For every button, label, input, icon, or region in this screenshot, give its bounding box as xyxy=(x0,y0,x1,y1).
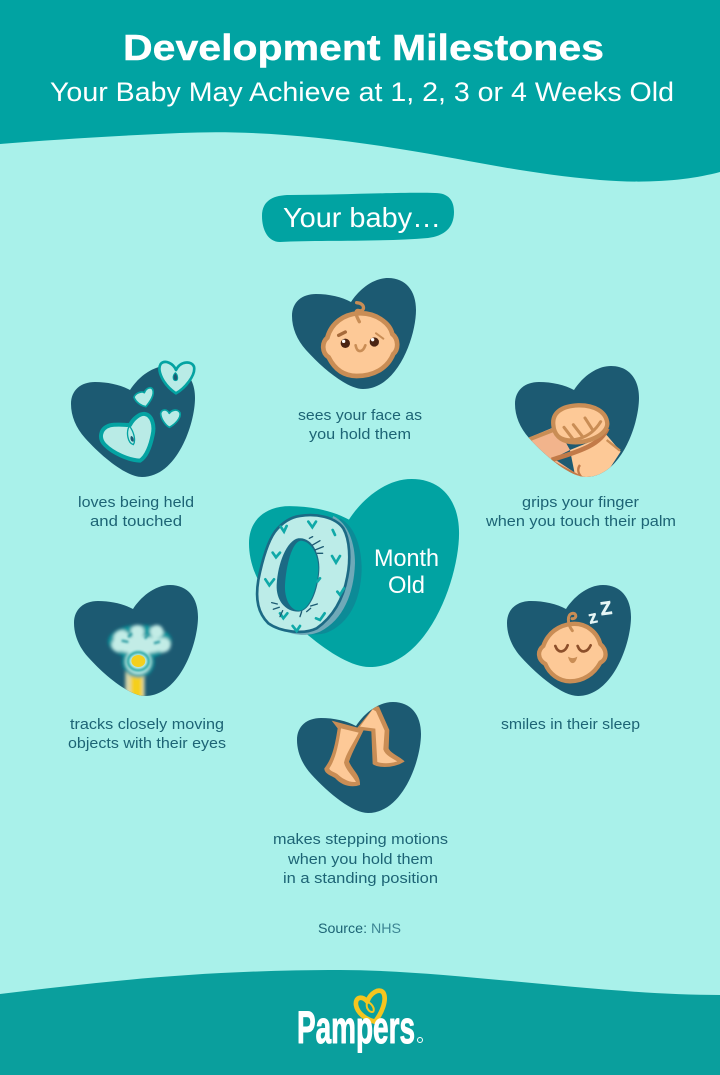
icon: sleeping baby xyxy=(539,597,613,681)
icon: baby hand gripping finger xyxy=(523,405,621,483)
milestone: stepping motions: when you hold them xyxy=(287,851,433,868)
icon: zzz: Z xyxy=(599,597,613,619)
milestone: smiles in sleep xyxy=(501,585,640,733)
milestone: grips your finger: when you touch their palm xyxy=(485,513,676,530)
icon: blurred toy xyxy=(108,625,172,698)
caption: tracks closely moving xyxy=(70,716,224,733)
caption: loves being held xyxy=(78,494,194,511)
milestone: tracks moving objects: objects with their eyes xyxy=(68,735,226,752)
caption: grips your finger xyxy=(522,494,639,511)
footer banner xyxy=(0,970,720,1075)
caption: makes stepping motions xyxy=(273,831,448,848)
logo: Pampers xyxy=(297,991,422,1053)
logo: Pampers: Pampers xyxy=(297,1002,415,1053)
source: Source: NHS xyxy=(318,920,401,936)
milestone: sees your face xyxy=(292,278,422,443)
icon: hearts xyxy=(101,362,194,461)
month badge: Old xyxy=(388,572,425,599)
pill heading: your baby: Your baby… xyxy=(283,202,441,233)
label: Month xyxy=(374,545,439,572)
subtitle: Your Baby May Achieve at 1, 2, 3 or 4 Weeks Old xyxy=(50,77,674,107)
icon: baby face xyxy=(323,303,397,376)
milestone: stepping motions: in a standing position xyxy=(283,870,438,887)
caption: sees your face as xyxy=(298,407,422,424)
milestone: grips your finger xyxy=(485,366,676,530)
month badge xyxy=(249,479,459,667)
caption: smiles in their sleep xyxy=(501,716,640,733)
milestone: loves being held xyxy=(71,362,195,530)
milestone: tracks moving objects xyxy=(68,585,226,752)
icon: number zero xyxy=(257,515,362,635)
pill heading: your baby xyxy=(262,193,454,242)
icon: baby legs xyxy=(324,706,405,786)
milestone: stepping motions xyxy=(273,702,448,887)
title: Development Milestones xyxy=(123,27,604,68)
header banner xyxy=(0,0,720,182)
milestone: loves being held: and touched xyxy=(90,513,182,530)
icon: sleeping baby: z xyxy=(586,606,599,628)
milestone: sees your face: you hold them xyxy=(309,426,411,443)
